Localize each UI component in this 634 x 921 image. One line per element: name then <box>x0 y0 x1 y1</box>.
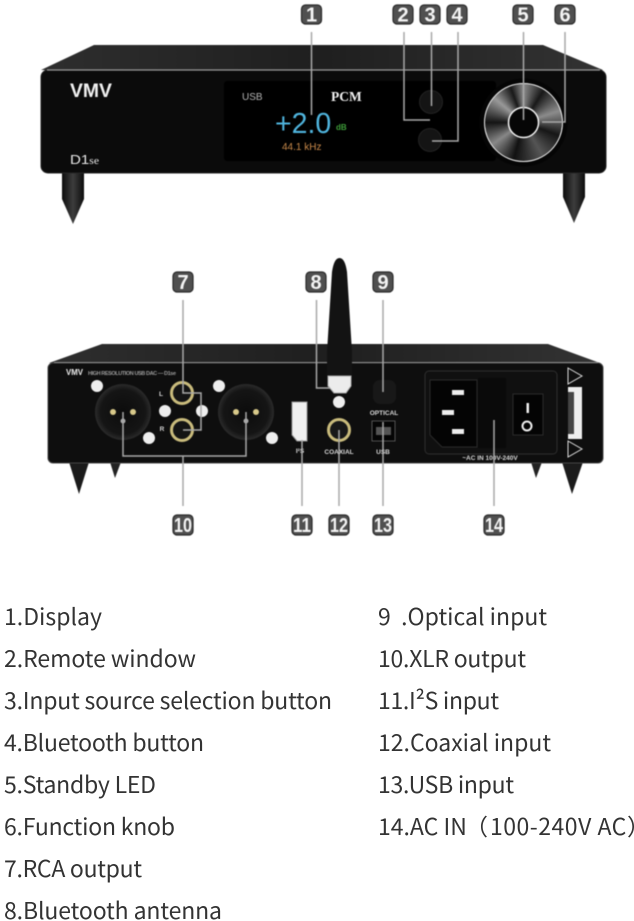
function knob <box>484 83 564 163</box>
badge 4: 4 <box>451 4 463 26</box>
legend item 6: 6.Function knob <box>4 808 175 842</box>
rear logo: VMV <box>66 368 84 377</box>
coaxial port: COAXIAL <box>324 449 354 456</box>
badge 11: 11 <box>293 515 311 537</box>
RCA connectors: R <box>160 426 165 433</box>
display sample rate: 44.1 kHz <box>282 142 321 153</box>
input source button <box>420 90 442 114</box>
badge 9: 9 <box>377 272 389 294</box>
right XLR connector <box>213 380 278 444</box>
front leader lines <box>312 32 565 141</box>
RCA connectors <box>159 382 208 440</box>
front panel <box>41 70 606 173</box>
antenna <box>327 258 352 408</box>
badge 3 <box>420 4 440 26</box>
USB port: USB <box>376 449 390 456</box>
badge 6 <box>555 4 575 26</box>
rear heading: HIGH RESOLUTION USB DAC — D1se <box>88 371 176 377</box>
bluetooth button <box>418 128 442 152</box>
model name: D1 se <box>70 152 100 167</box>
rear leader lines <box>123 300 494 506</box>
badge 4 <box>447 4 467 26</box>
rear panel highlight <box>54 362 598 364</box>
power switch <box>513 394 543 435</box>
optical port <box>370 380 398 417</box>
badge 10: 10 <box>174 515 192 537</box>
optical port: OPTICAL <box>370 410 398 417</box>
logo: VMV <box>70 81 112 102</box>
rear panel <box>48 363 603 463</box>
legend item 3: 3.Input source selection button <box>4 682 332 716</box>
rating label and warning triangles <box>568 368 582 457</box>
coaxial port <box>324 420 354 456</box>
display unit: dB <box>336 123 347 132</box>
badge 1: 1 <box>306 4 317 26</box>
badge 5 <box>513 4 533 26</box>
display volume: +2.0 <box>275 108 331 140</box>
badge 6: 6 <box>559 4 571 26</box>
RCA connectors: L <box>159 391 163 398</box>
left XLR connector <box>91 380 155 444</box>
rear top cover <box>49 344 600 363</box>
AC voltage label: ~AC IN 100V-240V <box>462 455 518 462</box>
badge 12: 12 <box>330 515 348 537</box>
badge 8: 8 <box>310 272 322 294</box>
front feet <box>62 172 585 224</box>
badge 14: 14 <box>485 515 504 537</box>
legend item 12: 12.Coaxial input <box>378 724 551 758</box>
AC inlet module <box>425 371 557 462</box>
I2S port: I²S <box>296 448 305 455</box>
badge 8 <box>306 272 326 294</box>
badge 7 <box>173 272 193 294</box>
badge 7: 7 <box>177 272 189 294</box>
legend item 1: 1.Display <box>4 598 102 632</box>
legend left column <box>4 598 332 921</box>
legend item 9: 9 .Optical input <box>378 598 547 632</box>
badge 5: 5 <box>517 4 529 26</box>
legend item 7: 7.RCA output <box>4 850 142 884</box>
USB port <box>372 421 395 456</box>
legend item 11: 11.I²S input <box>378 682 499 716</box>
badge 2 <box>393 4 413 26</box>
legend item 5: 5.Standby LED <box>4 766 156 800</box>
badge 13: 13 <box>374 515 392 537</box>
I2S port <box>292 402 307 455</box>
legend item 14: 100-240V AC <box>490 808 627 842</box>
legend right column <box>378 598 634 842</box>
display format: PCM <box>331 89 362 104</box>
rear feet <box>69 462 583 494</box>
legend item 14: 14.AC IN <box>378 808 467 842</box>
legend item 2: 2.Remote window <box>4 640 196 674</box>
legend item 4: 4.Bluetooth button <box>4 724 204 758</box>
legend item 14: （ <box>465 808 488 842</box>
knob halo <box>480 78 568 166</box>
legend item 13: 13.USB input <box>378 766 514 800</box>
display <box>224 81 496 161</box>
rear view of the unit <box>48 258 603 537</box>
badge 2: 2 <box>397 4 409 26</box>
display source: USB <box>242 92 263 103</box>
front view of the unit <box>41 4 606 224</box>
badge 3: 3 <box>424 4 436 26</box>
badge 9 <box>373 272 393 294</box>
panel top highlight <box>47 69 600 71</box>
top cover <box>41 45 603 70</box>
badge 1 <box>302 4 322 26</box>
legend item 10: 10.XLR output <box>378 640 526 674</box>
